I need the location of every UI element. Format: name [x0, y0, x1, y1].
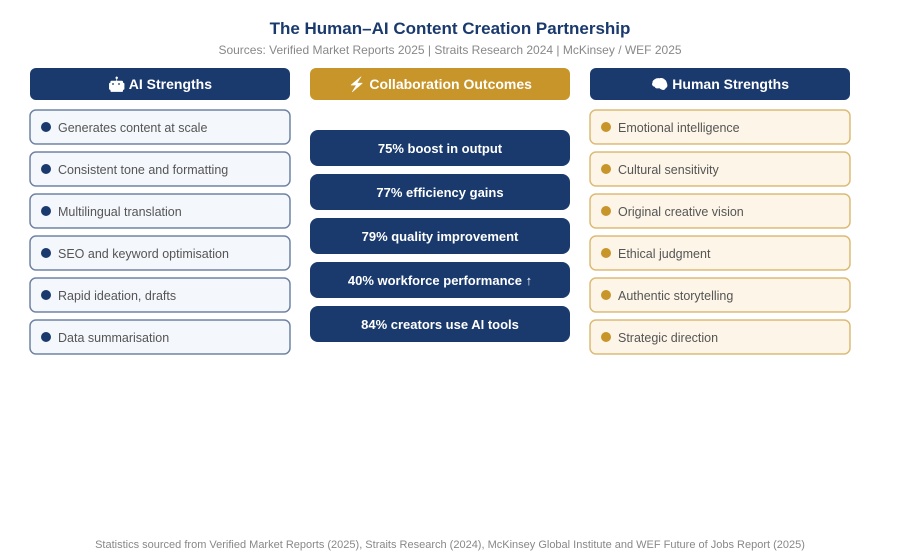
item: generates content: Generates content at scale [58, 121, 207, 135]
stat: quality improvement: 79% quality improvement [362, 229, 518, 244]
item: generates content [29, 109, 291, 145]
footer: source note: Statistics sourced from Verified Market Reports (2025), Straits Research (2024), McKinsey Global Institute and WEF Future of Jobs Report (2025) [95, 539, 805, 551]
title: The Human–AI Content Creation Partnership [270, 19, 630, 38]
heading: collaboration outcomes: ⚡ Collaboration Outcomes [348, 76, 532, 92]
heading: human strengths [590, 68, 850, 100]
item: consistent tone: Consistent tone and formatting [58, 163, 228, 177]
heading: AI strengths [30, 68, 290, 100]
stat: creators using AI: 84% creators use AI tools [361, 317, 519, 332]
item: ethical judgment: Ethical judgment [618, 247, 710, 261]
item: storytelling: Authentic storytelling [618, 289, 733, 303]
item: cultural sensitivity: Cultural sensitivity [618, 163, 719, 177]
stat: efficiency gains: 77% efficiency gains [376, 185, 504, 200]
panel: human strengths [589, 68, 851, 355]
heading: collaboration outcomes [310, 68, 570, 100]
item: cultural sensitivity [589, 151, 851, 187]
item: SEO [29, 235, 291, 271]
item: consistent tone [29, 151, 291, 187]
subtitle: sources: Sources: Verified Market Reports 2025 | Straits Research 2024 | McKinsey / WEF 2025 [218, 43, 682, 57]
panel: AI strengths [29, 68, 291, 355]
item: translation: Multilingual translation [58, 205, 182, 219]
item: rapid ideation [29, 277, 291, 313]
item: SEO: SEO and keyword optimisation [58, 247, 229, 261]
item: data summarisation: Data summarisation [58, 331, 169, 345]
item: creative vision [589, 193, 851, 229]
item: emotional intelligence: Emotional intelligence [618, 121, 740, 135]
panel: collaboration outcomes [310, 68, 570, 342]
stat: quality improvement [310, 218, 570, 254]
stat: creators using AI [310, 306, 570, 342]
stat: workforce performance: 40% workforce performance ↑ [348, 273, 532, 288]
item: translation [29, 193, 291, 229]
heading: human strengths: 🧠 Human Strengths [651, 76, 789, 92]
item: data summarisation [29, 319, 291, 355]
stat: workforce performance [310, 262, 570, 298]
item: rapid ideation: Rapid ideation, drafts [58, 289, 176, 303]
item: strategic direction [589, 319, 851, 355]
stat: efficiency gains [310, 174, 570, 210]
item: creative vision: Original creative vision [618, 205, 744, 219]
stat: output boost: 75% boost in output [378, 141, 502, 156]
stat: output boost [310, 130, 570, 166]
item: emotional intelligence [589, 109, 851, 145]
item: storytelling [589, 277, 851, 313]
item: ethical judgment [589, 235, 851, 271]
heading: AI strengths: 🤖 AI Strengths [108, 76, 212, 92]
item: strategic direction: Strategic direction [618, 331, 718, 345]
